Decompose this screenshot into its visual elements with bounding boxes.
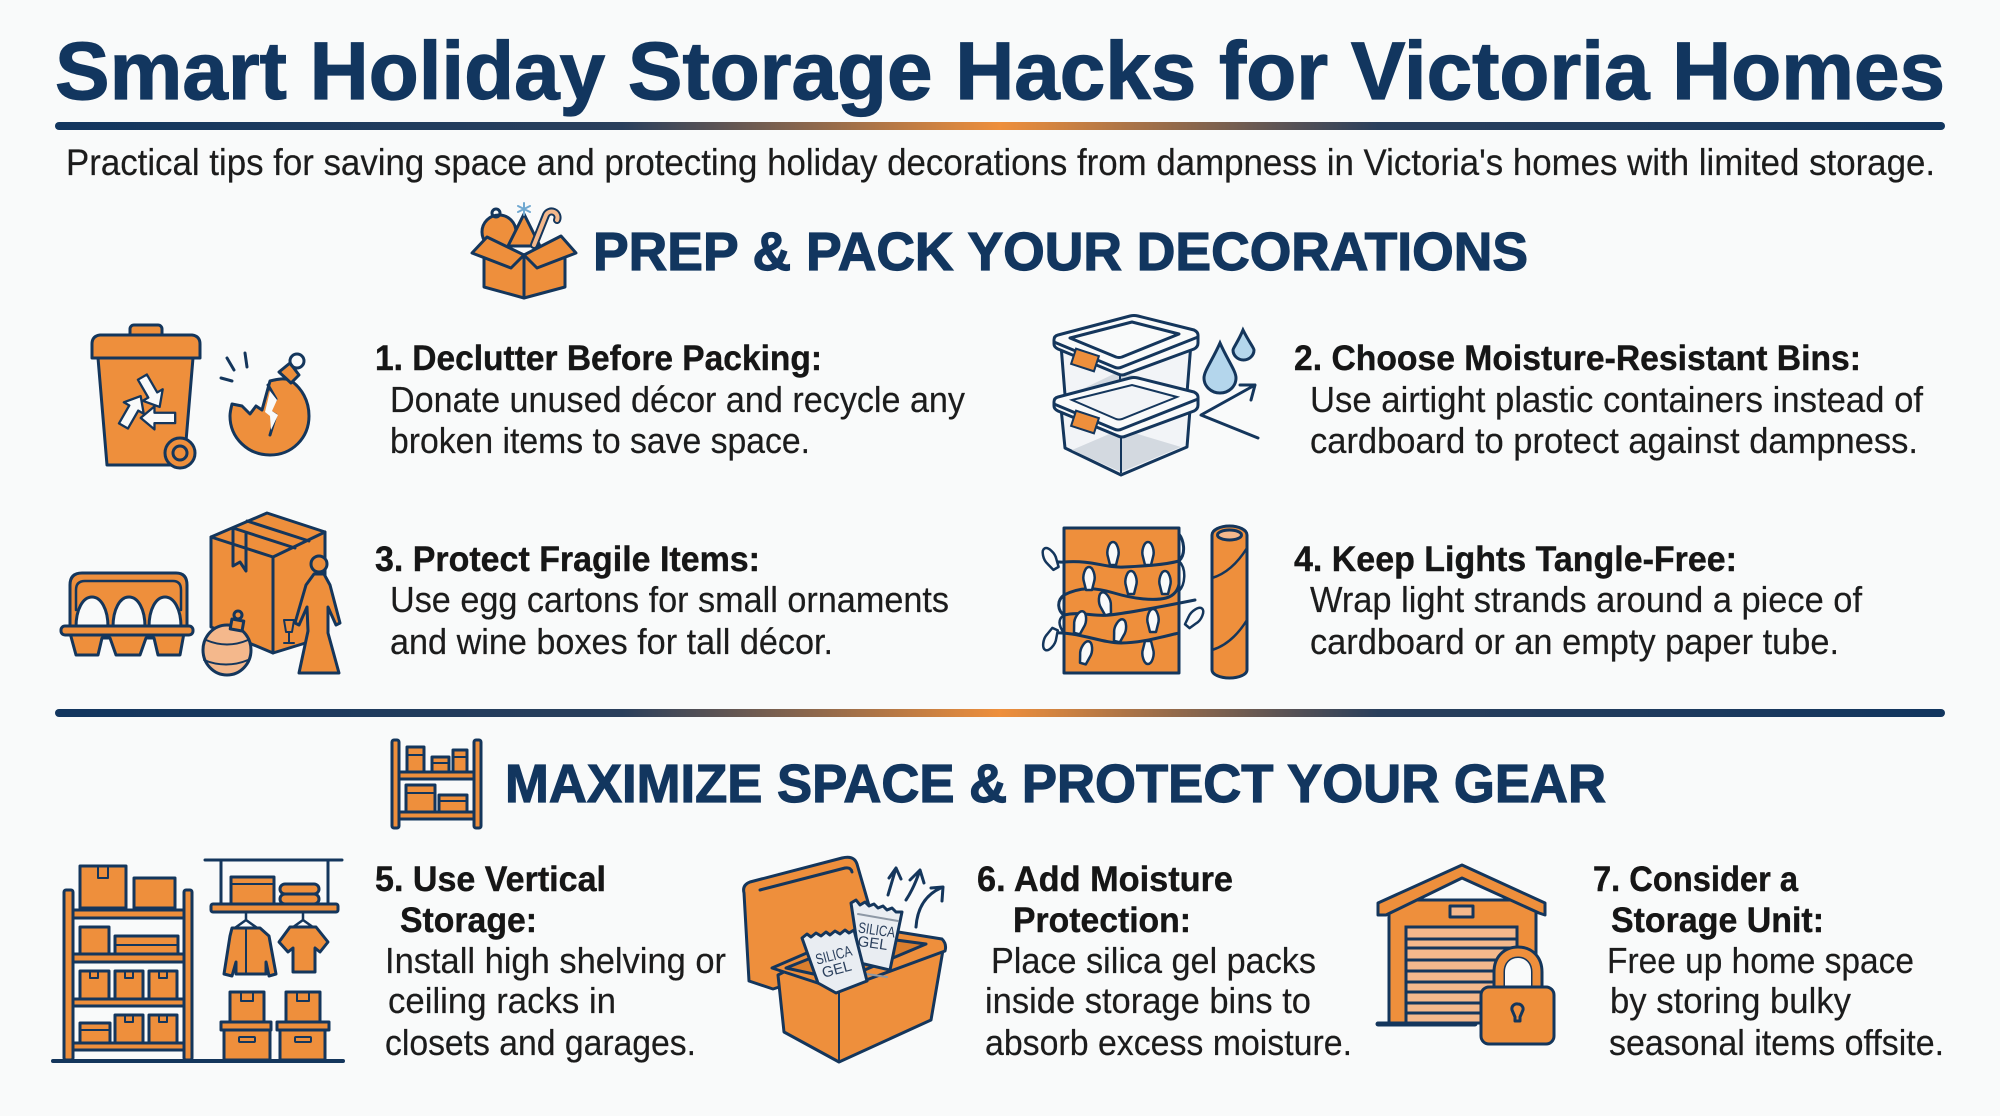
icon: recycling bin and broken ornament	[92, 325, 309, 468]
tip 3 text: 3. Protect Fragile Items:	[375, 540, 760, 579]
tip 6 text	[977, 860, 1352, 1063]
icon: open box of decorations	[472, 203, 576, 298]
tip 5 text: 5. Use Vertical	[375, 860, 606, 899]
tip 4 text	[1294, 540, 1863, 662]
icon: open bin with silica gel packs: SILICA	[814, 943, 854, 969]
subtitle: Practical tips for saving space and protecting holiday decorations from dampness in Victoria's homes with limited storage.	[66, 142, 1935, 183]
icon: open bin with silica gel packs: SILICA	[857, 920, 896, 942]
tip 7 text: Free up home space	[1607, 940, 1914, 981]
tip 2 text: Use airtight plastic containers instead of	[1310, 379, 1924, 420]
tip 7 text: seasonal items offsite.	[1609, 1022, 1944, 1063]
icon: small shelf unit	[392, 740, 481, 828]
icon: open bin with silica gel packs: GEL	[857, 933, 889, 954]
tip 4 text: cardboard or an empty paper tube.	[1310, 621, 1839, 662]
icon: open bin with silica gel packs: GEL	[820, 958, 854, 982]
icon: open bin with silica gel packs	[744, 857, 946, 1062]
icon: stacked airtight bins with water drops	[1054, 316, 1258, 475]
tip 3 text: Use egg cartons for small ornaments	[390, 579, 949, 620]
tip 1 text: broken items to save space.	[390, 420, 810, 461]
tip 6 text: inside storage bins to	[985, 980, 1311, 1021]
tip 6 text: absorb excess moisture.	[985, 1022, 1352, 1063]
tip 7 text: by storing bulky	[1610, 980, 1851, 1021]
tip 2 text	[1294, 339, 1924, 461]
tip 5 text: Install high shelving or	[385, 940, 726, 981]
heading: maximize space: MAXIMIZE SPACE & PROTECT YOUR GEAR	[505, 754, 1606, 814]
tip 5 text: ceiling racks in	[388, 980, 616, 1021]
tip 3 text	[375, 540, 949, 662]
tip 3 text: and wine boxes for tall décor.	[390, 621, 833, 662]
tip 5 text	[375, 860, 726, 1063]
tip 5 text: Storage:	[400, 901, 537, 940]
tip 1 text: 1. Declutter Before Packing:	[375, 339, 822, 378]
tip 2 text: 2. Choose Moisture-Resistant Bins:	[1294, 339, 1861, 378]
icon: egg carton, wine box, ornament, figurine	[61, 513, 340, 675]
tip 2 text: cardboard to protect against dampness.	[1310, 420, 1918, 461]
title: Smart Holiday Storage Hacks for Victoria Homes	[55, 26, 1945, 117]
icon: storage unit with padlock	[1378, 865, 1554, 1044]
icon: shelving, ceiling rack, hanging clothes, boxes	[53, 860, 343, 1061]
tip 6 text: Protection:	[1013, 901, 1191, 940]
tip 4 text: Wrap light strands around a piece of	[1310, 579, 1863, 620]
tip 7 text: Storage Unit:	[1611, 901, 1824, 940]
tip 1 text: Donate unused décor and recycle any	[390, 379, 965, 420]
tip 7 text	[1593, 860, 1944, 1063]
tip 7 text: 7. Consider a	[1593, 860, 1798, 899]
tip 5 text: closets and garages.	[385, 1022, 696, 1063]
tip 6 text: 6. Add Moisture	[977, 860, 1233, 899]
tip 4 text: 4. Keep Lights Tangle-Free:	[1294, 540, 1737, 579]
icon: string lights on cardboard and paper tube	[1040, 526, 1247, 678]
heading: prep and pack: PREP & PACK YOUR DECORATIONS	[593, 222, 1528, 282]
tip 1 text	[375, 339, 965, 461]
tip 6 text: Place silica gel packs	[991, 940, 1316, 981]
